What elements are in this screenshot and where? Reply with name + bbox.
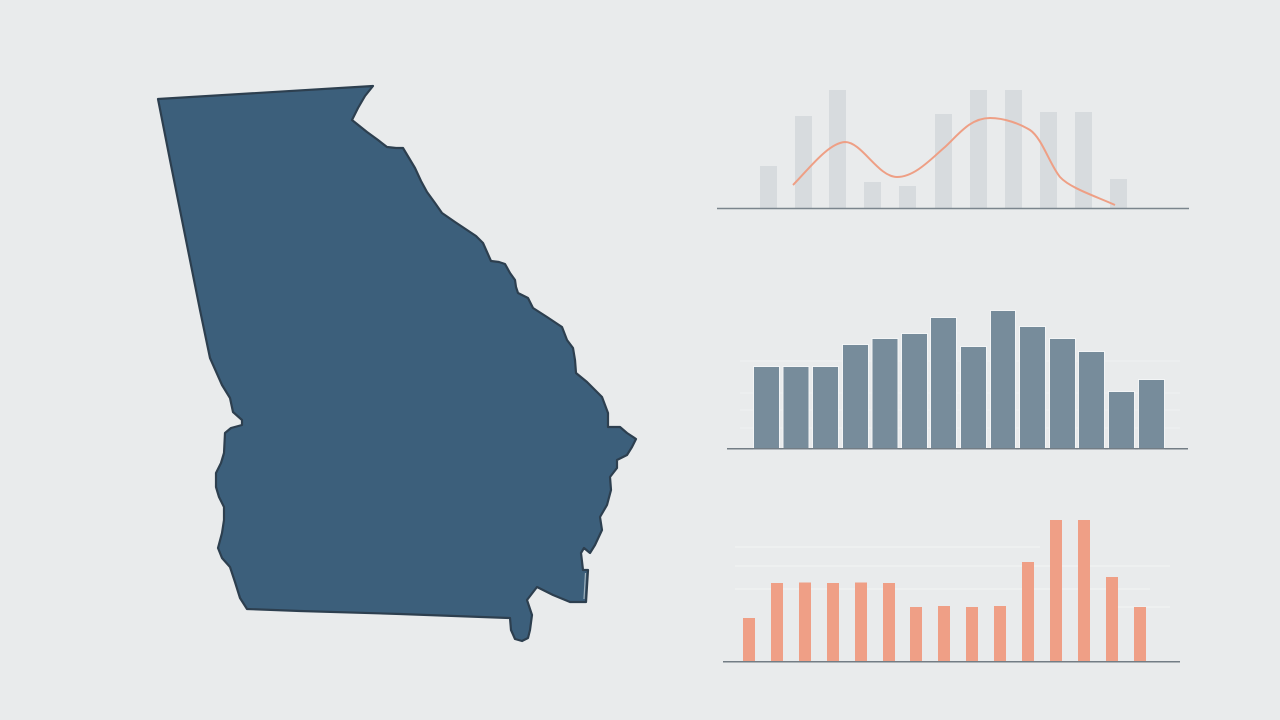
map: Georgia state silhouette: [158, 86, 636, 641]
chart: middle slate bar chart: [727, 311, 1188, 449]
line: trend curve: [793, 118, 1115, 205]
sliver: coastal island outline: [584, 573, 586, 599]
chart: top bar chart with line: [717, 90, 1189, 208]
chart: bottom orange bar chart: [723, 520, 1180, 662]
